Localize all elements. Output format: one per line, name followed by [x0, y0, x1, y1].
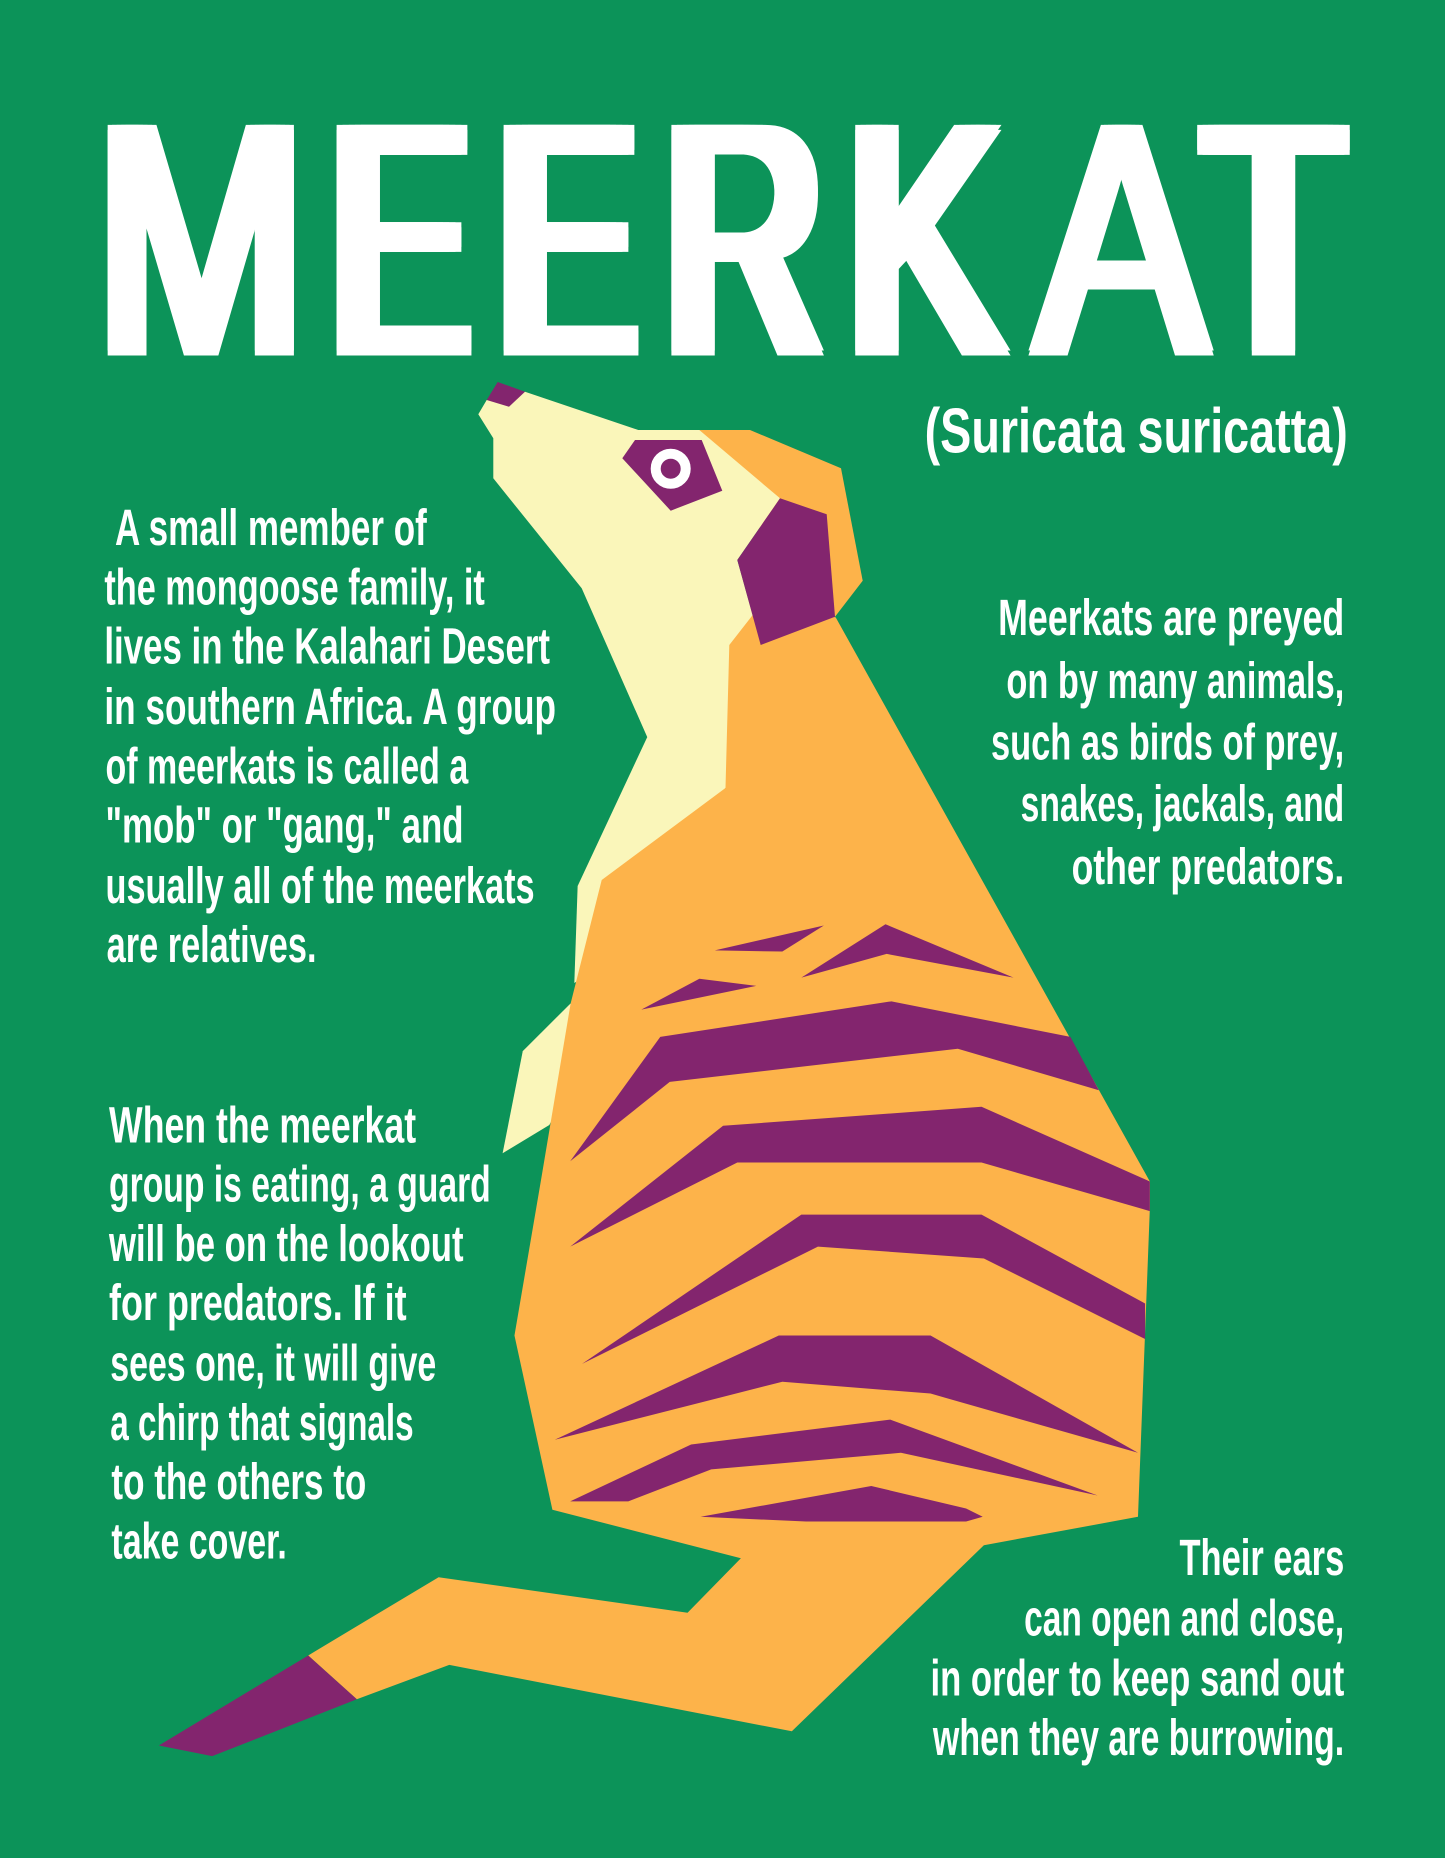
arm: cream [503, 1003, 581, 1153]
illustration: meerkat head [478, 382, 863, 788]
text block: guard: sees one, it will give [110, 1335, 436, 1392]
text block: intro [104, 499, 556, 973]
text block: guard: take cover. [111, 1512, 287, 1569]
text block: predators [991, 589, 1344, 895]
stripes: purple [555, 924, 1150, 1522]
illustration: meerkat body [159, 598, 1150, 1756]
text block: intro: A small member of [115, 499, 427, 556]
title: MEERKAT: R [664, 56, 822, 422]
chest sliver: cream [574, 723, 725, 983]
text block: ears: Their ears [1179, 1529, 1344, 1586]
title: MEERKAT: M [96, 56, 306, 422]
text block: guard: to the others to [111, 1453, 366, 1510]
tail tip: purple [159, 1655, 357, 1756]
text block: guard: for predators. If it [109, 1274, 407, 1331]
title: MEERKAT: K [847, 56, 1002, 422]
title: MEERKAT: T [1203, 56, 1344, 422]
title: MEERKAT: E [332, 56, 468, 422]
nose: purple [487, 382, 525, 407]
title: MEERKAT: A [1035, 56, 1207, 422]
eye ring: white [656, 454, 686, 484]
text block: guard: will be on the lookout [108, 1215, 464, 1272]
text block: intro: usually all of the meerkats [106, 857, 535, 914]
text block: ears [931, 1529, 1344, 1766]
face: cream [478, 392, 780, 788]
ear: purple [737, 498, 835, 645]
title: MEERKAT [96, 56, 1350, 422]
eye patch: purple [622, 440, 722, 511]
title: MEERKAT: E [499, 56, 635, 422]
text block: intro: lives in the Kalahari Desert [104, 618, 550, 675]
text block: intro: in southern Africa. A group [104, 678, 556, 735]
text block: intro: "mob" or "gang," and [106, 797, 463, 854]
text block: intro: the mongoose family, it [104, 558, 485, 615]
text block: guard [108, 1096, 491, 1569]
text block: intro: are relatives. [107, 916, 317, 973]
head: orange back [699, 430, 863, 617]
text block: intro: of meerkats is called a [106, 737, 469, 794]
text block: guard: When the meerkat [109, 1096, 416, 1153]
body: orange [308, 598, 1150, 1731]
text block: guard: group is eating, a guard [109, 1156, 491, 1213]
text block: guard: a chirp that signals [110, 1394, 414, 1451]
